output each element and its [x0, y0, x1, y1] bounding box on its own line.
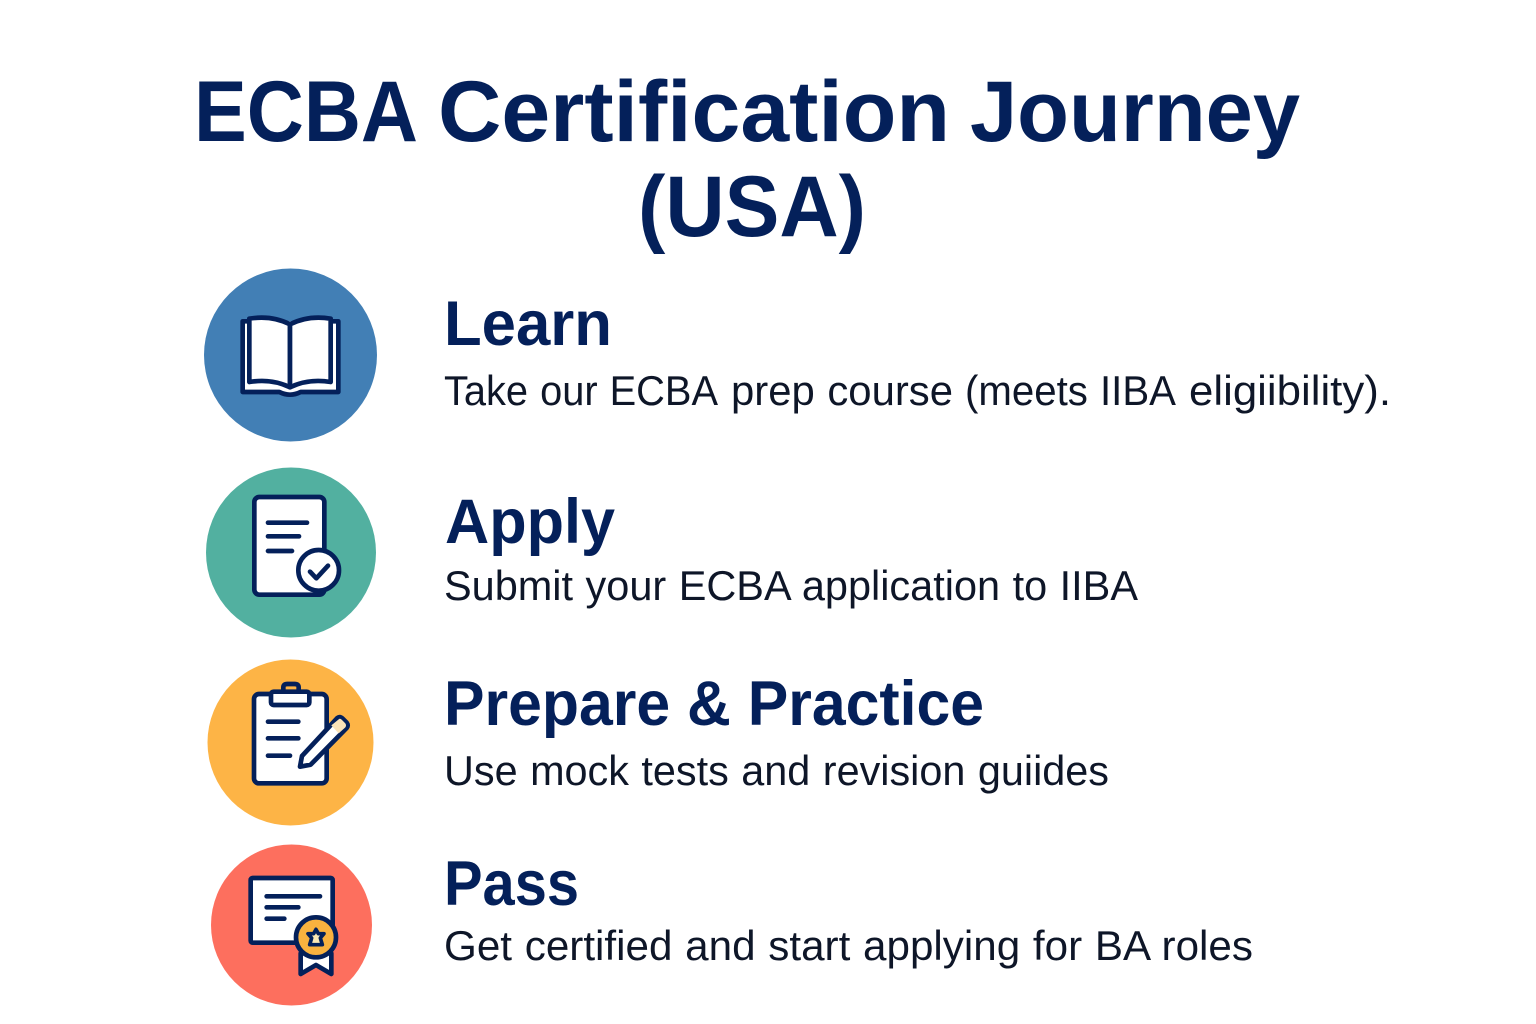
- description: Learn: (meets IIBA: [965, 367, 1176, 414]
- description: Apply: Submit your ECBA application to IIBA: [444, 562, 1138, 609]
- icon: certificate with ribbon: [211, 844, 372, 1006]
- heading: Prepare & Practice: Prepare & Practice: [444, 669, 984, 739]
- description: Prepare & Practice: Use mock tests and revision guiides: [444, 747, 1109, 794]
- step: Apply: [206, 468, 1138, 638]
- description: Learn: Take our ECBA: [444, 367, 718, 414]
- icon: open book: [204, 268, 377, 442]
- heading: Pass: Pass: [444, 849, 579, 919]
- title: [194, 64, 1300, 255]
- step: Pass: [211, 844, 1253, 1006]
- icon: document with check: [206, 468, 376, 638]
- heading: Learn: Learn: [444, 289, 612, 359]
- heading: Apply: Apply: [445, 487, 615, 557]
- description: Learn: [444, 367, 1391, 414]
- description: Learn: eligiibility).: [1189, 367, 1391, 414]
- title: Certification: [438, 64, 950, 160]
- step: Learn: [204, 268, 1391, 442]
- description: Pass: Get certified and start applying for BA roles: [444, 922, 1253, 969]
- icon: clipboard with pencil: [208, 660, 374, 826]
- step: Prepare & Practice: [208, 660, 1109, 826]
- title: (USA): [638, 159, 866, 255]
- title: Journey: [970, 64, 1300, 160]
- description: Learn: prep course: [731, 367, 953, 414]
- title: ECBA: [194, 64, 418, 160]
